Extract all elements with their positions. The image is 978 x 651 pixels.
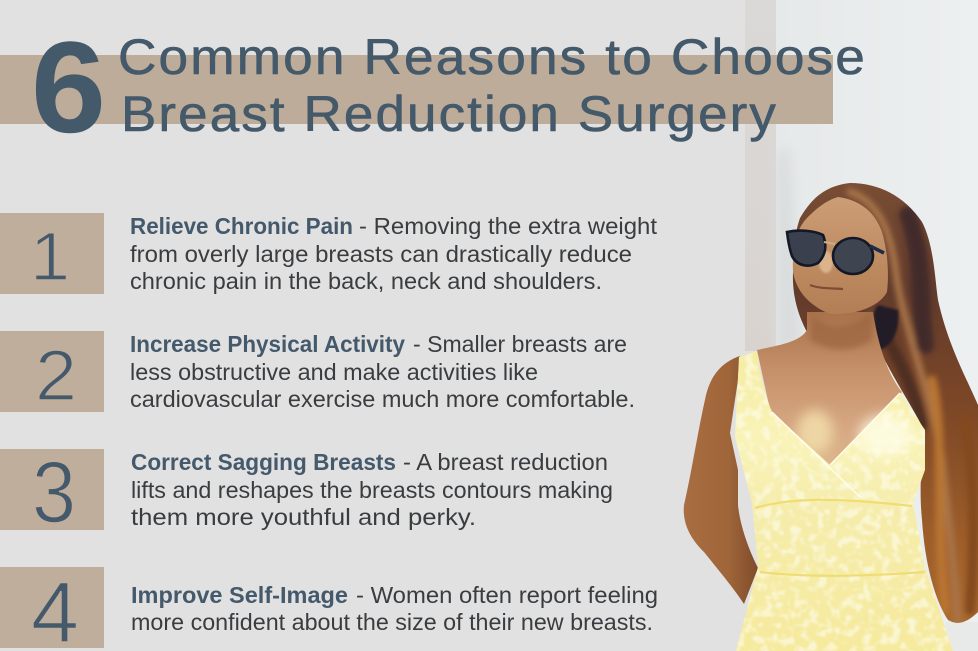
number box 4 — [0, 565, 104, 651]
title — [31, 14, 867, 160]
text 1 — [130, 213, 658, 294]
left arm — [684, 356, 758, 604]
nose highlight — [819, 251, 833, 273]
text 1: chronic pain in the back, neck and shoulders. — [130, 268, 602, 294]
text 3: Correct Sagging Breasts — [131, 449, 396, 475]
dark shadow under hair — [871, 305, 898, 350]
yellow dress — [735, 351, 953, 651]
title line 1: Common Reasons to Choose — [118, 29, 867, 85]
title band — [0, 55, 833, 124]
dress seams — [755, 500, 925, 576]
text 1: from overly large breasts can drastically reduce — [130, 241, 632, 267]
number box 1 — [0, 213, 104, 295]
text 2: cardiovascular exercise much more comfortable. — [130, 386, 635, 412]
text 3: them more youthful and perky. — [131, 504, 476, 530]
text 2: Increase Physical Activity — [130, 331, 405, 357]
sunglasses — [787, 231, 884, 274]
face — [793, 197, 888, 314]
number box 2: 2 — [35, 337, 77, 416]
neck and chest — [757, 312, 902, 468]
long hair — [785, 178, 978, 633]
text 2: less obstructive and make activities like — [130, 359, 538, 385]
number box 3: 3 — [32, 444, 76, 541]
text 2: - Smaller breasts are — [413, 331, 627, 357]
item 1 — [0, 213, 658, 295]
text 4: Improve Self-Image — [131, 582, 348, 608]
photo: woman in yellow dress — [684, 178, 978, 651]
big number 6: 6 — [31, 14, 106, 160]
neck shadow — [810, 310, 872, 349]
number box 1: 1 — [30, 218, 70, 295]
chest highlight — [797, 410, 833, 454]
item 3 — [0, 444, 613, 541]
mouth — [810, 285, 843, 289]
text 1: - Removing the extra weight — [359, 213, 658, 239]
item 2 — [0, 331, 635, 416]
number box 2 — [0, 331, 104, 416]
dress bust highlight — [859, 415, 911, 455]
text 2 — [130, 331, 635, 412]
text 4: - Women often report feeling — [356, 582, 658, 608]
text 3: - A breast reduction — [403, 449, 608, 475]
hair strands — [850, 192, 973, 625]
text 3 — [131, 449, 613, 530]
number box 3 — [0, 444, 104, 541]
text 1: Relieve Chronic Pain — [130, 213, 353, 239]
item 4 — [0, 565, 658, 651]
title line 2: Breast Reduction Surgery — [121, 86, 778, 142]
dress floral pattern — [730, 345, 960, 651]
text 4 — [131, 582, 658, 635]
text 3: lifts and reshapes the breasts contours making — [131, 477, 613, 503]
text 4: more confident about the size of their new breasts. — [131, 609, 653, 635]
